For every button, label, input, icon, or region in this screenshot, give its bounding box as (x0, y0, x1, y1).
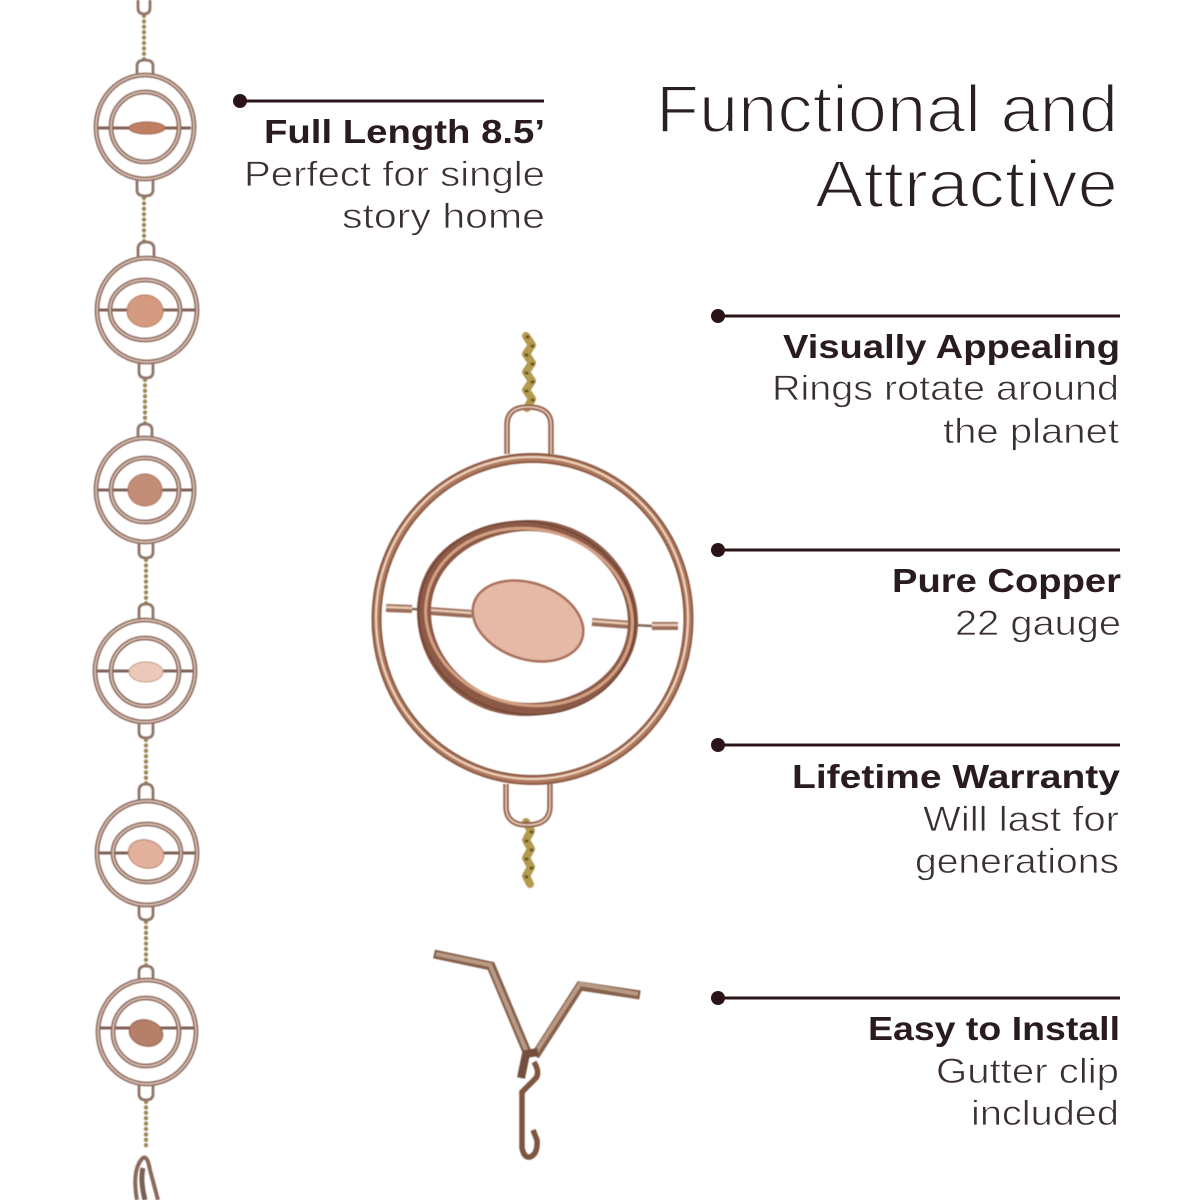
ring unit 4 (95, 604, 195, 738)
callout: pure copper: Pure Copper (892, 562, 1121, 599)
callout: lifetime warranty: generations (915, 842, 1119, 881)
chain links (138, 0, 150, 1150)
callout: pure copper (711, 543, 1121, 643)
callout: full length: Perfect for single (244, 155, 545, 194)
inner ring (400, 501, 654, 735)
callout: lifetime warranty (711, 738, 1121, 881)
callout: visually appealing: Rings rotate around (772, 369, 1119, 408)
outer ring (376, 457, 688, 780)
callout: lifetime warranty: Will last for (923, 800, 1119, 839)
ring unit 5 (97, 784, 197, 920)
callout: easy to install: included (971, 1094, 1119, 1133)
title: Attractive (815, 147, 1118, 222)
bottom cup fragment (135, 1158, 158, 1200)
callout: full length: story home (342, 197, 545, 236)
callout: full length: Full Length 8.5’ (264, 113, 545, 150)
callout: lifetime warranty: Lifetime Warranty (792, 758, 1121, 795)
title: Functional and (656, 72, 1118, 147)
ring unit 3 (96, 424, 194, 558)
top chain (526, 336, 533, 408)
callout: visually appealing: the planet (943, 412, 1119, 451)
ring unit 1 (96, 60, 194, 196)
bottom chain (526, 822, 532, 884)
ring unit 6 (98, 966, 196, 1100)
title (656, 72, 1118, 222)
ring unit 2 (97, 242, 197, 378)
callout: easy to install: Easy to Install (868, 1010, 1120, 1047)
callout: pure copper: 22 gauge (955, 604, 1121, 643)
gutter clip (434, 954, 640, 1157)
callout: visually appealing (711, 309, 1120, 451)
axis rods (386, 607, 678, 626)
large copper ring detail (376, 336, 688, 884)
callout: easy to install (711, 991, 1120, 1133)
callout: visually appealing: Visually Appealing (783, 328, 1120, 365)
callout: easy to install: Gutter clip (936, 1052, 1119, 1091)
planet disc (462, 567, 594, 675)
rain chain strip (95, 0, 197, 1200)
hanging loops (506, 407, 551, 825)
callout: full length (233, 94, 545, 236)
